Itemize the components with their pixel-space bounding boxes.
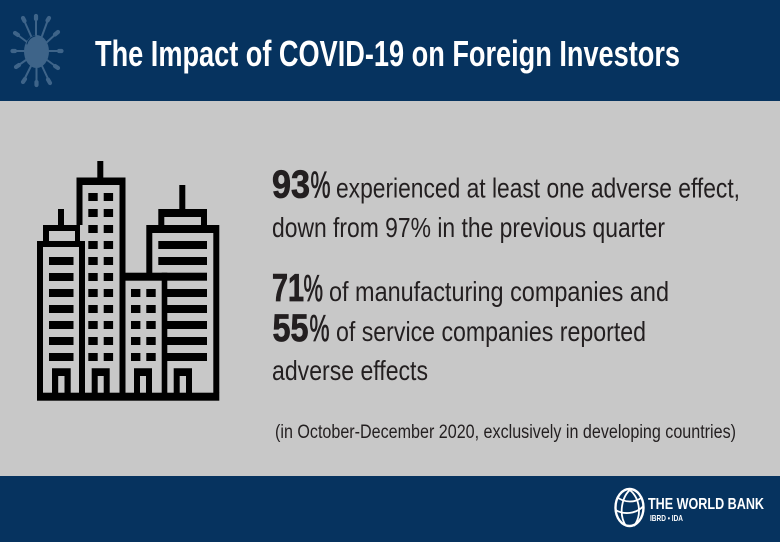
left building <box>37 209 85 393</box>
statistic: 71% and 55% by sector: of service companies reported <box>336 316 646 347</box>
icon: virus <box>12 15 62 85</box>
footer band <box>0 476 780 542</box>
header band <box>0 0 780 101</box>
statistic: 71% and 55% by sector <box>272 267 669 386</box>
icon: globe <box>616 489 644 526</box>
small front building <box>125 273 207 394</box>
statistic: 71% and 55% by sector: % <box>310 308 330 349</box>
central tower <box>76 161 126 393</box>
statistic: 93% adverse effect: 93 <box>272 164 310 206</box>
statistic: 93% adverse effect <box>272 164 740 243</box>
statistic: 71% and 55% by sector: 55 <box>272 307 308 350</box>
logo: The World Bank <box>616 489 765 526</box>
statistic: 71% and 55% by sector: 71 <box>272 267 304 310</box>
logo: The World Bank: IBRD • IDA <box>650 513 683 523</box>
statistic: 93% adverse effect: % <box>310 164 330 206</box>
ground line <box>37 393 219 401</box>
statistic: 71% and 55% by sector: adverse effects <box>272 355 428 386</box>
statistic: 93% adverse effect: down from 97% in the previous quarter <box>272 212 665 243</box>
building doors <box>52 368 192 393</box>
statistic: 71% and 55% by sector: % <box>304 268 323 309</box>
statistic: 71% and 55% by sector: of manufacturing companies and <box>329 276 669 307</box>
icon: office buildings <box>37 161 219 401</box>
right building <box>146 185 219 393</box>
